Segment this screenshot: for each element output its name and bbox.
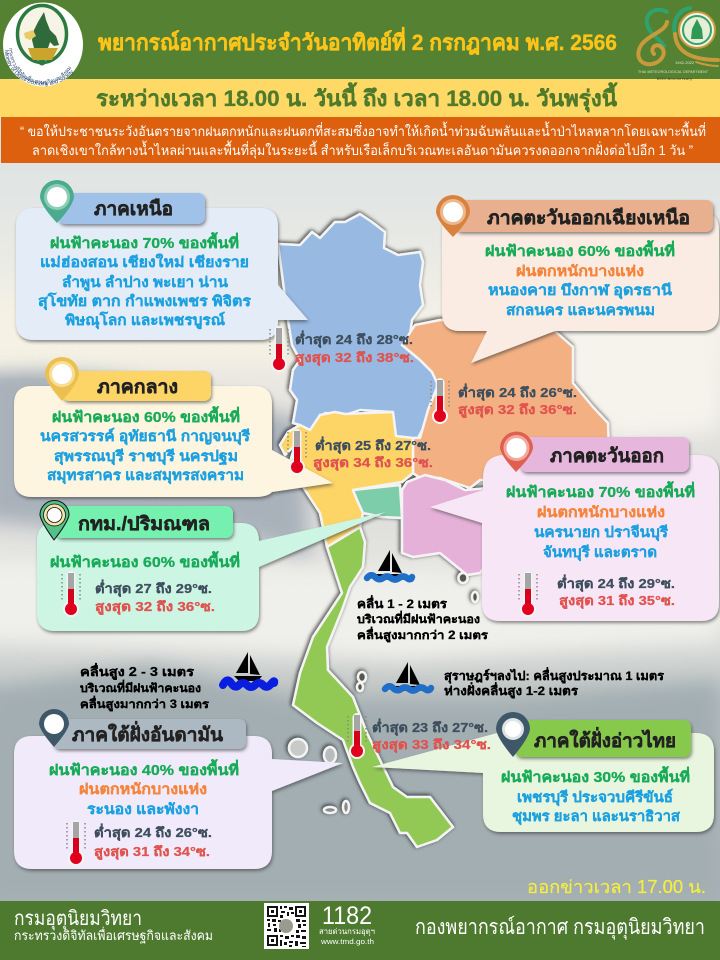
icon: Gulf pin bbox=[496, 712, 530, 757]
text: lower Gulf wave notice: สุราษฎร์ฯลงไป: คลื่นสูงประมาณ 1 เมตร bbox=[444, 667, 665, 684]
map temperature: south bbox=[348, 713, 491, 759]
text: north forecast: แม่ฮ่องสอน เชียงใหม่ เชียงราย bbox=[40, 253, 249, 271]
icon: 80th anniversary logo: 80th Anniversary bbox=[657, 77, 692, 81]
heading: central: ภาคกลาง bbox=[97, 377, 178, 398]
heading: north bbox=[58, 193, 205, 224]
text: Andaman wave notice bbox=[80, 663, 210, 712]
region: Bangkok and vicinity bbox=[353, 485, 402, 518]
panel: Bangkok and vicinity bbox=[37, 500, 386, 631]
heading: central bbox=[62, 371, 211, 401]
text: Andaman wave notice: คลื่นสูง 2 - 3 เมตร bbox=[80, 663, 194, 680]
footer bbox=[0, 901, 720, 960]
icon: boat, Andaman sea bbox=[223, 652, 274, 687]
time range band: ระหว่างเวลา 18.00 น. วันนี้ ถึง เวลา 18.00 น. วันพรุ่งนี้ bbox=[96, 82, 618, 113]
icon: QR code bbox=[264, 903, 309, 949]
text: northeast forecast: ฝนฟ้าคะนอง 60% ของพื้นที่ bbox=[485, 240, 675, 260]
text: Andaman wave notice: คลื่นสูงมากกว่า 3 เมตร bbox=[80, 695, 210, 712]
text: Andaman forecast: ฝนฟ้าคะนอง 40% ของพื้นที่ bbox=[49, 759, 239, 779]
map temperature: northeast: สูงสุด 32 ถึง 36°ซ. bbox=[458, 402, 577, 418]
time range band bbox=[0, 79, 720, 117]
text: upper Gulf wave notice: บริเวณที่มีฝนฟ้าคะนอง bbox=[357, 610, 480, 626]
islands bbox=[289, 573, 478, 813]
hotline: สายด่วนกรมอุตุฯ bbox=[319, 927, 375, 936]
region: north bbox=[278, 214, 438, 438]
map of Thailand bbox=[278, 214, 610, 847]
hotline bbox=[319, 902, 375, 946]
temperature: Bangkok: ต่ำสุด 27 ถึง 29°ซ. bbox=[95, 579, 212, 597]
text: lower Gulf wave notice bbox=[444, 667, 665, 699]
heading: Gulf: ภาคใต้ฝั่งอ่าวไทย bbox=[534, 727, 676, 752]
text: Andaman forecast bbox=[49, 759, 239, 818]
warning banner bbox=[1, 117, 720, 163]
icon: northeast pin bbox=[436, 195, 470, 237]
text: north forecast: สุโขทัย ตาก กำแพงเพชร พิจิตร bbox=[38, 292, 251, 310]
map temperature: north: สูงสุด 32 ถึง 38°ซ. bbox=[295, 350, 414, 366]
heading: Gulf bbox=[515, 720, 691, 757]
text: Bangkok forecast: ฝนฟ้าคะนอง 60% ของพื้นที่ bbox=[50, 551, 240, 571]
text: upper Gulf wave notice bbox=[357, 595, 489, 643]
heading: east bbox=[520, 437, 689, 472]
warning banner: ลาดเชิงเขาใกล้ทางน้ำไหลผ่านและพื้นที่ลุ่มในระยะนี้ สำหรับเรือเล็กบริเวณทะเลอันดามันควรงดออกจากฝั่งต่อไปอีก 1 วัน ” bbox=[32, 140, 693, 159]
panel: east bbox=[430, 432, 719, 621]
text: Gulf forecast: ฝนฟ้าคะนอง 30% ของพื้นที่ bbox=[501, 766, 690, 786]
text: northeast forecast: หนองคาย บึงกาฬ อุดรธานี bbox=[488, 282, 672, 299]
title: พยากรณ์อากาศประจำวันอาทิตย์ที่ 2 กรกฎาคม พ.ศ. 2566 bbox=[98, 26, 617, 55]
icon: department logo bbox=[3, 2, 83, 86]
text: upper Gulf wave notice: คลื่นสูงมากกว่า 2 เมตร bbox=[357, 626, 489, 643]
text: Gulf forecast: เพชรบุรี ประจวบคีรีขันธ์ bbox=[517, 788, 673, 806]
text: central forecast bbox=[40, 406, 250, 484]
map temperature: north bbox=[270, 326, 414, 372]
hotline: 1182 bbox=[322, 902, 372, 930]
hotline: www.tmd.go.th bbox=[320, 937, 374, 946]
icon: boat, lower Gulf bbox=[385, 662, 431, 691]
panel: Gulf south bbox=[372, 712, 714, 832]
icon: north pin bbox=[40, 180, 74, 223]
text: east forecast: ฝนฟ้าคะนอง 70% ของพื้นที่ bbox=[506, 481, 695, 501]
text: upper Gulf wave notice: คลื่น 1 - 2 เมตร bbox=[357, 595, 448, 611]
text: Andaman forecast: ฝนตกหนักบางแห่ง bbox=[79, 782, 207, 798]
text: east forecast: ฝนตกหนักบางแห่ง bbox=[537, 505, 665, 521]
text: east forecast: จันทบุรี และตราด bbox=[543, 544, 657, 561]
department name: กรมอุตุนิยมวิทยา bbox=[14, 908, 142, 931]
icon: boat, upper Gulf bbox=[367, 550, 412, 580]
text: north forecast: ฝนฟ้าคะนอง 70% ของพื้นที่ bbox=[50, 232, 239, 252]
heading: northeast: ภาคตะวันออกเฉียงเหนือ bbox=[487, 207, 690, 229]
temperature: Bangkok bbox=[62, 571, 215, 617]
icon: Andaman pin bbox=[39, 709, 69, 747]
text: Andaman forecast: ระนอง และพังงา bbox=[87, 802, 199, 818]
panel: northeast bbox=[436, 195, 719, 363]
panel: Andaman south bbox=[14, 709, 343, 869]
region: east bbox=[402, 475, 490, 575]
icon: 80th anniversary logo: 1942-2022 bbox=[675, 60, 695, 65]
temperature: Andaman: สูงสุด 31 ถึง 34°ซ. bbox=[94, 844, 210, 860]
icon: 80th anniversary logo bbox=[638, 8, 718, 81]
temperature: Andaman bbox=[67, 820, 212, 866]
department name bbox=[14, 908, 213, 944]
region: central bbox=[280, 412, 413, 547]
region: northeast bbox=[402, 320, 610, 488]
text: Andaman wave notice: บริเวณที่มีฝนฟ้าคะนอง bbox=[80, 679, 201, 695]
text: lower Gulf wave notice: ห่างฝั่งคลื่นสูง 1-2 เมตร bbox=[444, 682, 579, 699]
icon: central pin bbox=[45, 357, 79, 401]
header band bbox=[0, 0, 720, 79]
icon: east pin bbox=[500, 432, 533, 472]
text: northeast forecast: สกลนคร และนครพนม bbox=[506, 303, 655, 319]
map temperature: south: ต่ำสุด 23 ถึง 27°ซ. bbox=[372, 718, 488, 736]
icon: Bangkok pin bbox=[40, 500, 69, 540]
icon: department logo: กระทรวงดิจิทัลเพื่อเศรษฐกิจและสังคม bbox=[9, 48, 72, 86]
heading: Bangkok: กทม./ปริมณฑล bbox=[78, 514, 210, 535]
heading: northeast bbox=[455, 200, 713, 232]
text: northeast forecast: ฝนตกหนักบางแห่ง bbox=[516, 264, 644, 280]
text: north forecast: ลำพูน ลำปาง พะเยา น่าน bbox=[62, 274, 228, 291]
text: Gulf forecast: ชุมพร ยะลา และนราธิวาส bbox=[512, 808, 680, 825]
temperature: east: สูงสุด 31 ถึง 35°ซ. bbox=[559, 593, 675, 609]
text: north forecast: พิษณุโลก และเพชรบูรณ์ bbox=[65, 311, 226, 329]
text: central forecast: สมุทรสาคร และสมุทรสงคราม bbox=[47, 468, 244, 484]
map temperature: northeast: ต่ำสุด 24 ถึง 26°ซ. bbox=[458, 383, 577, 401]
heading: Andaman bbox=[53, 719, 246, 749]
map temperature: south: สูงสุด 33 ถึง 34°ซ. bbox=[372, 737, 491, 753]
heading: Bangkok bbox=[55, 506, 233, 538]
text: north forecast bbox=[38, 232, 251, 329]
panel: north bbox=[16, 180, 308, 340]
temperature: Andaman: ต่ำสุด 24 ถึง 26°ซ. bbox=[94, 823, 212, 841]
temperature: Bangkok: สูงสุด 32 ถึง 36°ซ. bbox=[95, 599, 215, 615]
icon: 80th anniversary logo: THAI METEOROLOGICAL DEPARTMENT bbox=[638, 70, 709, 74]
map temperature: central bbox=[288, 429, 433, 475]
map temperature: central: ต่ำสุด 25 ถึง 27°ซ. bbox=[315, 436, 431, 454]
issue time: ออกข่าวเวลา 17.00 น. bbox=[527, 877, 706, 897]
text: central forecast: นครสวรรค์ อุทัยธานี กาญจนบุรี bbox=[40, 427, 250, 445]
map temperature: northeast bbox=[431, 378, 577, 424]
heading: east: ภาคตะวันออก bbox=[550, 446, 664, 467]
map temperature: north: ต่ำสุด 24 ถึง 28°ซ. bbox=[295, 330, 413, 348]
department name: กระทรวงดิจิทัลเพื่อเศรษฐกิจและสังคม bbox=[14, 927, 213, 944]
icon: department logo: Ministry of Digital Economy and Society bbox=[4, 50, 74, 86]
text: Gulf forecast bbox=[501, 766, 690, 825]
text: east forecast: นครนายก ปราจีนบุรี bbox=[534, 524, 668, 541]
region: south bbox=[293, 527, 453, 847]
text: central forecast: ฝนฟ้าคะนอง 60% ของพื้นที่ bbox=[52, 406, 240, 426]
text: northeast forecast bbox=[485, 240, 675, 319]
map temperature: central: สูงสุด 34 ถึง 36°ซ. bbox=[313, 455, 433, 471]
text: central forecast: สุพรรณบุรี ราชบุรี นครปฐม bbox=[54, 448, 238, 466]
panel: central bbox=[14, 357, 333, 497]
heading: Andaman: ภาคใต้ฝั่งอันดามัน bbox=[72, 721, 223, 746]
temperature: east bbox=[519, 571, 675, 617]
temperature: east: ต่ำสุด 24 ถึง 29°ซ. bbox=[557, 574, 675, 592]
text: east forecast bbox=[506, 481, 695, 561]
heading: north: ภาคเหนือ bbox=[94, 198, 173, 220]
